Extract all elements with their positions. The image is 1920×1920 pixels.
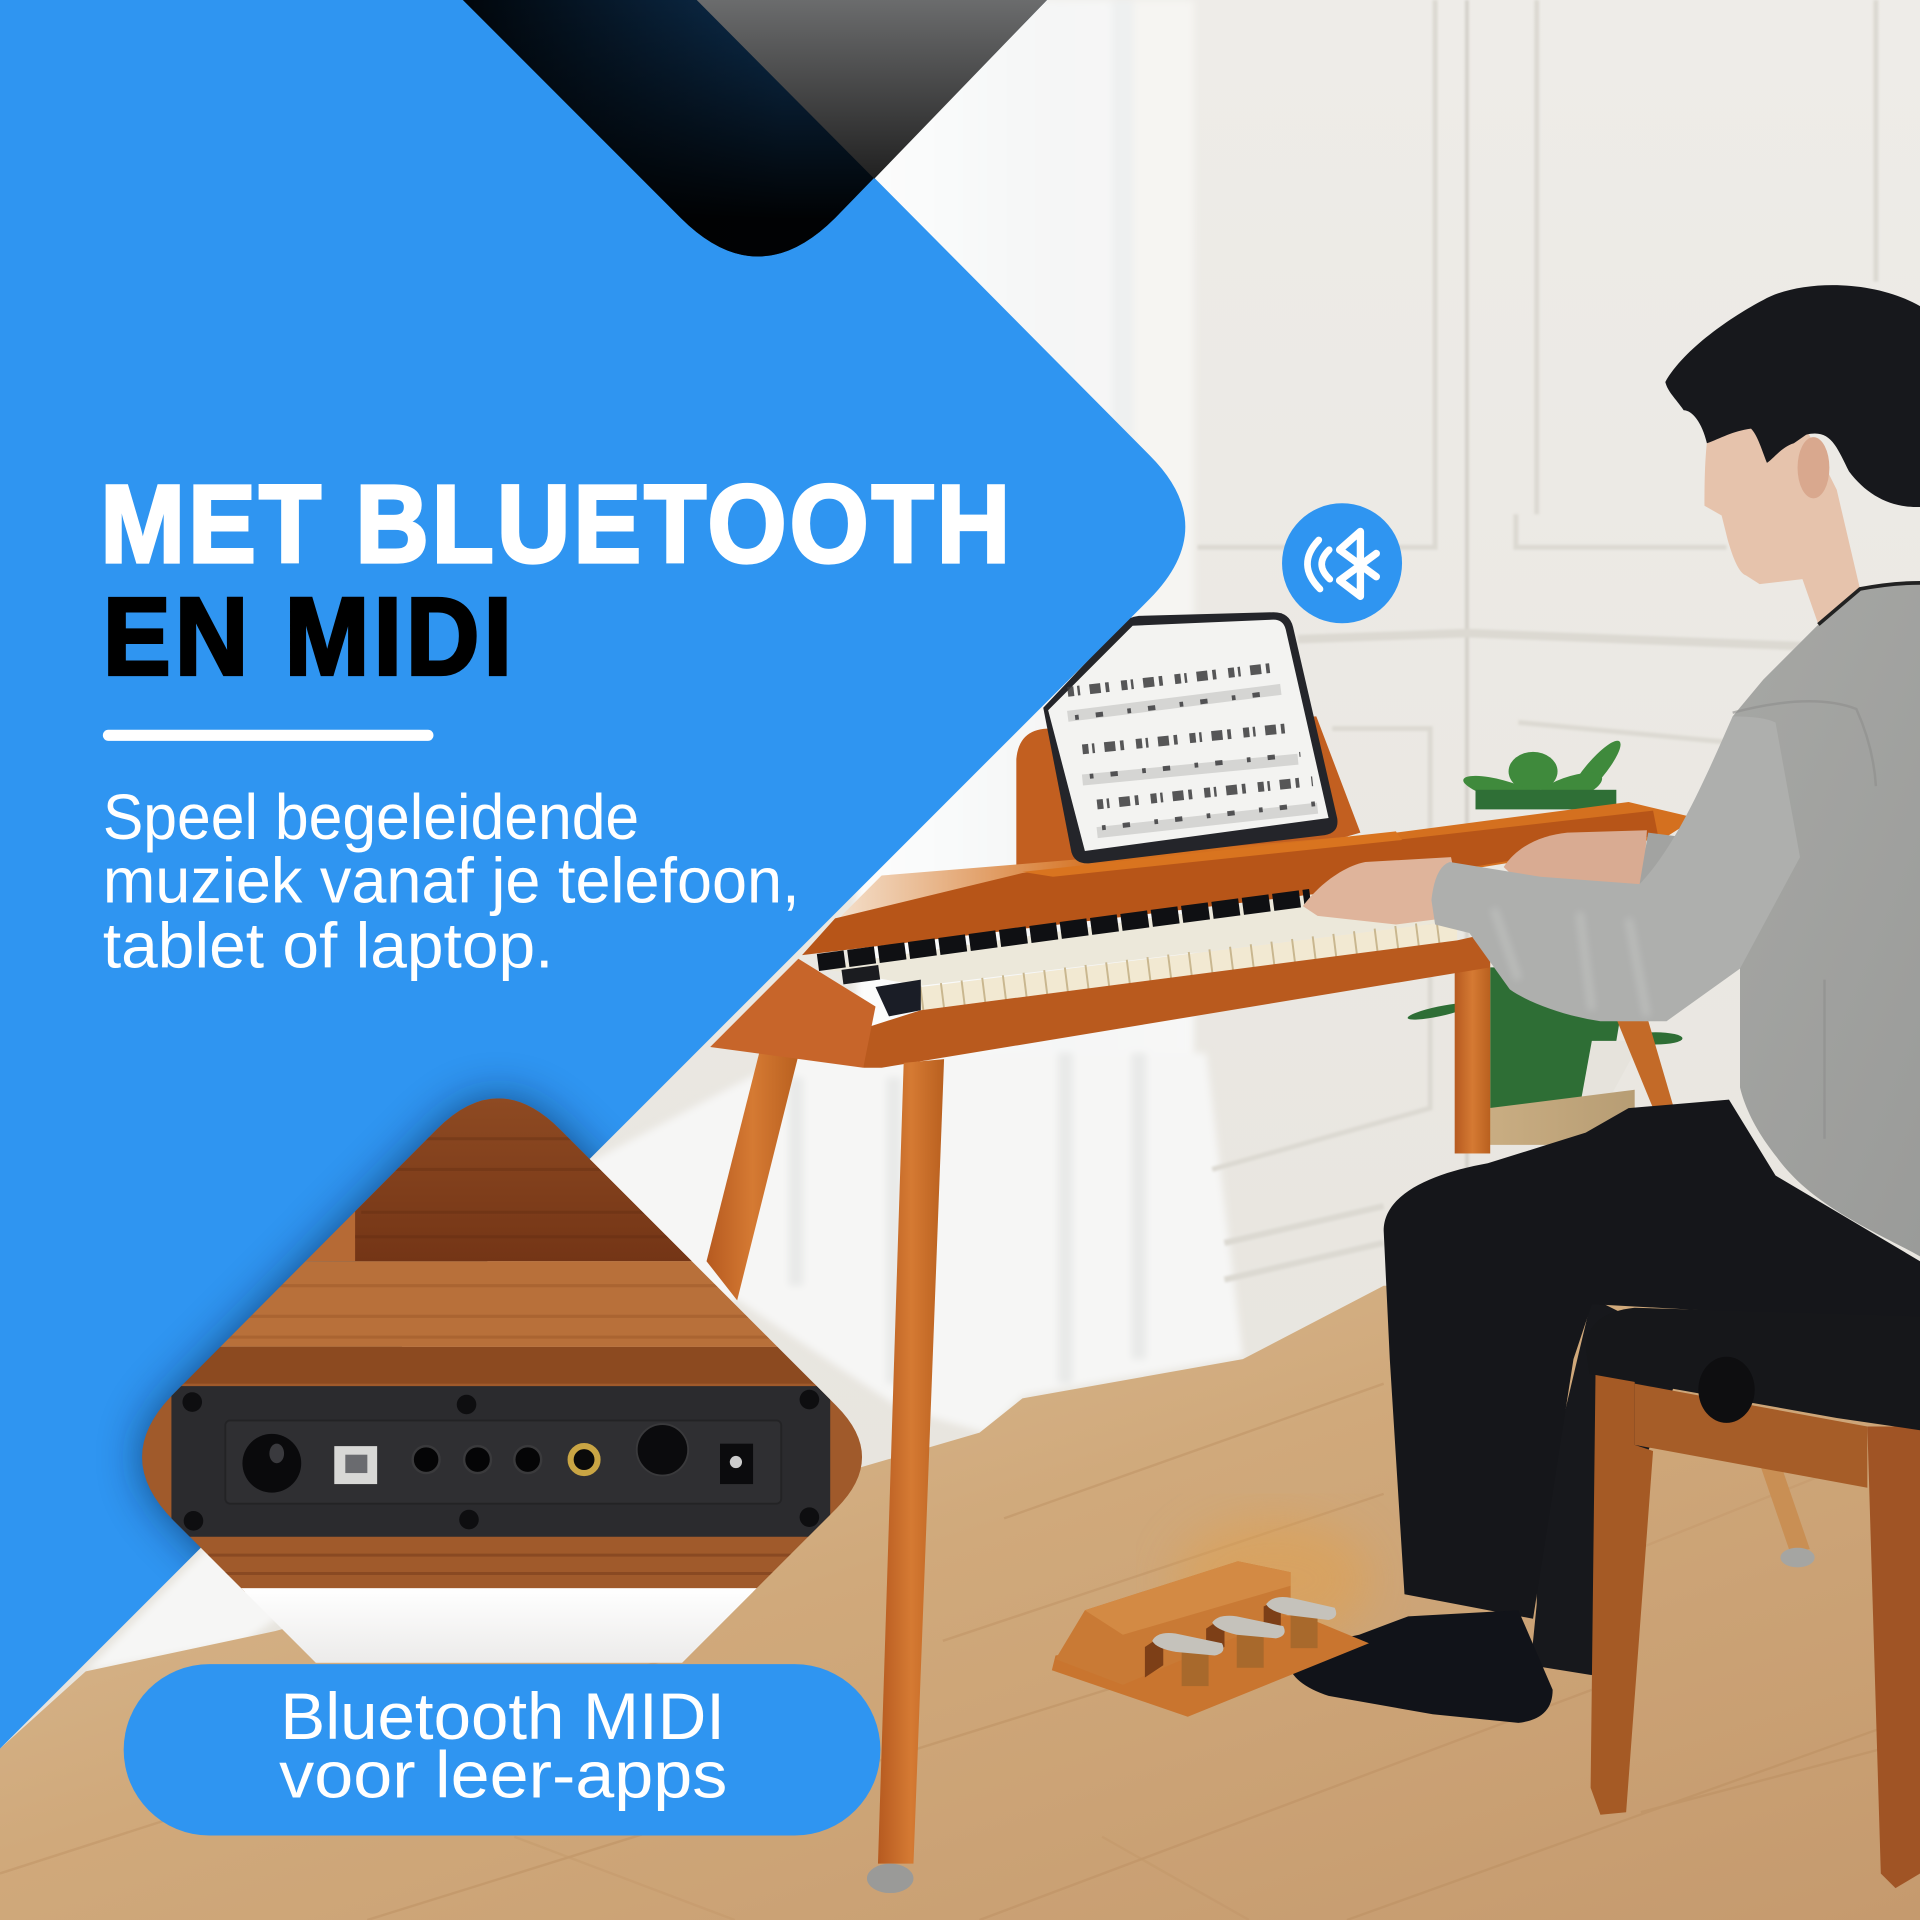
pedal housing — [1056, 1561, 1291, 1685]
floor planks — [0, 1384, 1920, 1920]
gold jack — [571, 1446, 598, 1473]
silver pedals — [1152, 1597, 1336, 1656]
top deck — [808, 802, 1696, 953]
sheet music staves — [1068, 667, 1320, 833]
person: trousers — [1384, 1100, 1920, 1619]
floor — [0, 1286, 1920, 1920]
midi port — [637, 1424, 688, 1476]
curtain — [86, 0, 1243, 1671]
fascia — [802, 811, 1658, 955]
person: ear — [1798, 437, 1829, 498]
gray highlight facet — [697, 0, 1047, 179]
music stand — [1016, 716, 1360, 872]
title: MET BLUETOOTH — [100, 463, 1010, 586]
person: collar — [1818, 583, 1920, 624]
rear trouser leg and sock — [1531, 1298, 1690, 1675]
person: left hand — [1303, 857, 1463, 924]
person: right hand — [1504, 830, 1647, 891]
person: forearm sleeve — [1431, 716, 1800, 1021]
person: socks — [1288, 1610, 1553, 1723]
body text — [103, 782, 800, 981]
pedal stems — [1182, 1614, 1318, 1686]
inset photo: rear connector panel — [142, 1098, 862, 1663]
audio jacks — [413, 1446, 541, 1473]
black keys — [818, 898, 1310, 977]
ledge — [1022, 831, 1402, 877]
wood grain — [184, 1139, 833, 1573]
title underline — [103, 730, 433, 741]
person: sweater torso — [1641, 583, 1920, 1256]
piano back legs — [707, 967, 1674, 1300]
bench seat — [1586, 1308, 1920, 1430]
wall panel mouldings — [1198, 0, 1876, 1298]
end cheek — [710, 959, 876, 1068]
wood surfaces — [306, 1098, 692, 1262]
bench knob — [1698, 1357, 1755, 1423]
pill label — [124, 1664, 880, 1836]
volume knob — [242, 1434, 301, 1493]
body text: Speel begeleidende — [103, 782, 639, 853]
body text: tablet of laptop. — [103, 910, 553, 981]
person: hair — [1665, 285, 1920, 507]
front foot — [867, 1864, 913, 1893]
white keys — [921, 921, 1457, 1010]
person: neck and face — [1704, 416, 1860, 624]
white under panel — [241, 1588, 757, 1663]
bench rear leg — [1761, 1467, 1815, 1567]
key block — [876, 980, 921, 1016]
body text: muziek vanaf je telefoon, — [103, 845, 800, 916]
sleeve folds — [1494, 909, 1647, 1016]
digital piano — [710, 716, 1696, 1893]
front rail — [863, 933, 1490, 1068]
person: rear sleeve — [1640, 833, 1696, 894]
keys under right hand — [1518, 879, 1643, 913]
bench legs — [1591, 1374, 1653, 1815]
plant — [1407, 735, 1682, 1145]
plate screws — [182, 1390, 819, 1531]
plate inner outline — [225, 1420, 781, 1504]
keybed — [814, 894, 1457, 986]
dark corner diamond — [463, 0, 1047, 257]
arm seam — [1733, 701, 1876, 1139]
sustain pedal unit — [1052, 1561, 1369, 1717]
piano bench — [1586, 1308, 1920, 1888]
power socket — [720, 1444, 753, 1484]
title: EN MIDI — [103, 576, 512, 699]
tablet with sheet music — [1043, 612, 1337, 863]
lower leaves — [1407, 967, 1682, 1108]
pill label: Bluetooth MIDI — [280, 1680, 725, 1754]
usb port — [334, 1446, 377, 1484]
pedal slots — [1145, 1598, 1281, 1678]
bench apron — [1635, 1384, 1867, 1488]
pedal glow — [1176, 1518, 1371, 1641]
plant basket — [1489, 1090, 1635, 1145]
upper leaves — [1461, 735, 1627, 814]
connector plate — [171, 1386, 830, 1537]
bluetooth icon — [1307, 531, 1376, 596]
front leg — [878, 1059, 944, 1864]
bluetooth badge — [1282, 503, 1402, 623]
title — [100, 463, 1010, 699]
pedal base — [1052, 1614, 1369, 1717]
pill label: voor leer-apps — [279, 1739, 727, 1813]
blue angled panel — [0, 0, 1185, 1749]
inset photo shadow — [115, 1071, 610, 1568]
